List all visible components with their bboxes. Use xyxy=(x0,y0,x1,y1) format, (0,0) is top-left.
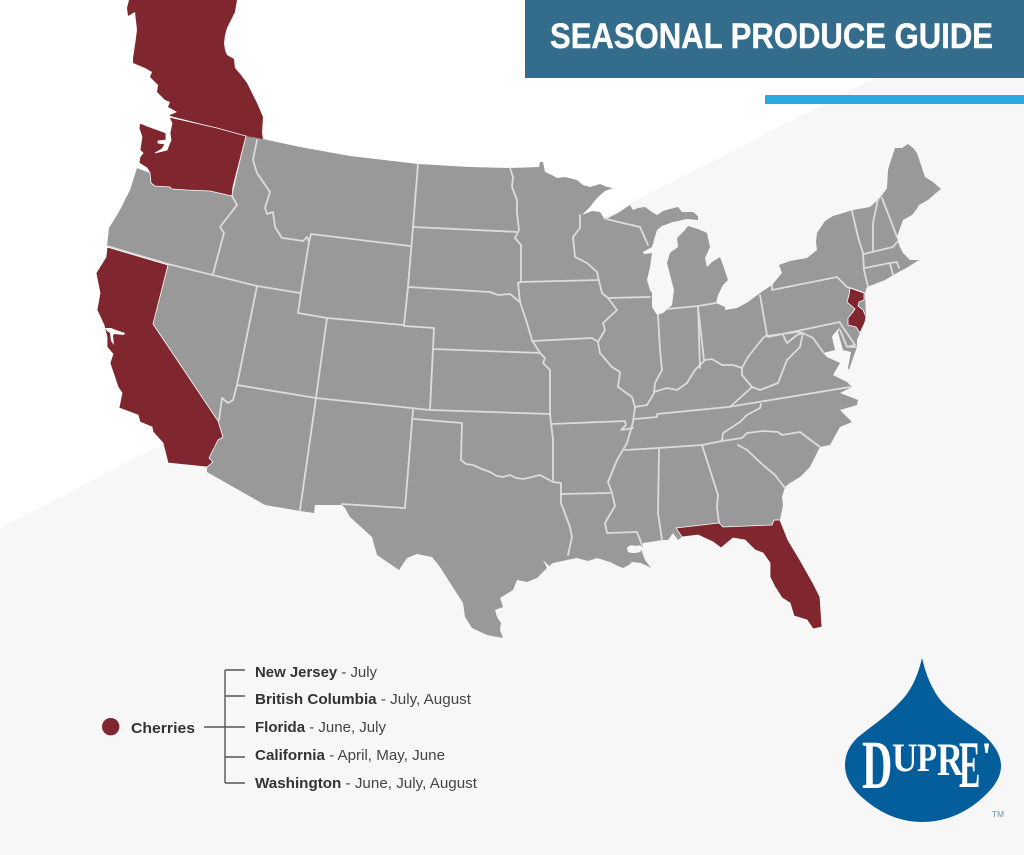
British Columbia entry: British Columbia - July, August xyxy=(255,691,472,708)
state borders xyxy=(107,140,899,555)
logo wordmark: D xyxy=(862,728,892,804)
trademark: TM xyxy=(992,810,1004,819)
accent bar xyxy=(765,95,1024,104)
state: California xyxy=(96,247,223,467)
New Jersey entry: New Jersey - July xyxy=(255,664,377,681)
connector bracket xyxy=(204,670,245,783)
logo wordmark: E xyxy=(959,728,980,802)
San Francisco Bay xyxy=(105,328,125,345)
legend label: Cherries xyxy=(131,720,195,737)
title banner xyxy=(525,0,1024,78)
legend: cherries xyxy=(102,664,478,792)
California entry: California - April, May, June xyxy=(255,747,445,764)
logo drop xyxy=(845,658,1001,822)
Washington entry: Washington - June, July, August xyxy=(255,775,478,792)
Dupre logo xyxy=(845,658,1004,822)
logo wordmark: R xyxy=(937,734,964,785)
state: Florida xyxy=(676,520,822,629)
gray land silhouette xyxy=(107,136,941,638)
region: British Columbia xyxy=(127,0,263,139)
legend dot xyxy=(102,718,119,735)
logo wordmark xyxy=(862,728,992,804)
state: New Jersey xyxy=(847,288,866,333)
Florida entry: Florida - June, July xyxy=(255,719,386,736)
map of North America xyxy=(96,0,941,638)
logo wordmark: U xyxy=(892,736,917,781)
logo wordmark: P xyxy=(917,735,937,780)
logo wordmark: ' xyxy=(981,734,992,779)
state: Washington xyxy=(139,117,246,196)
Lake Pontchartrain xyxy=(627,545,643,553)
